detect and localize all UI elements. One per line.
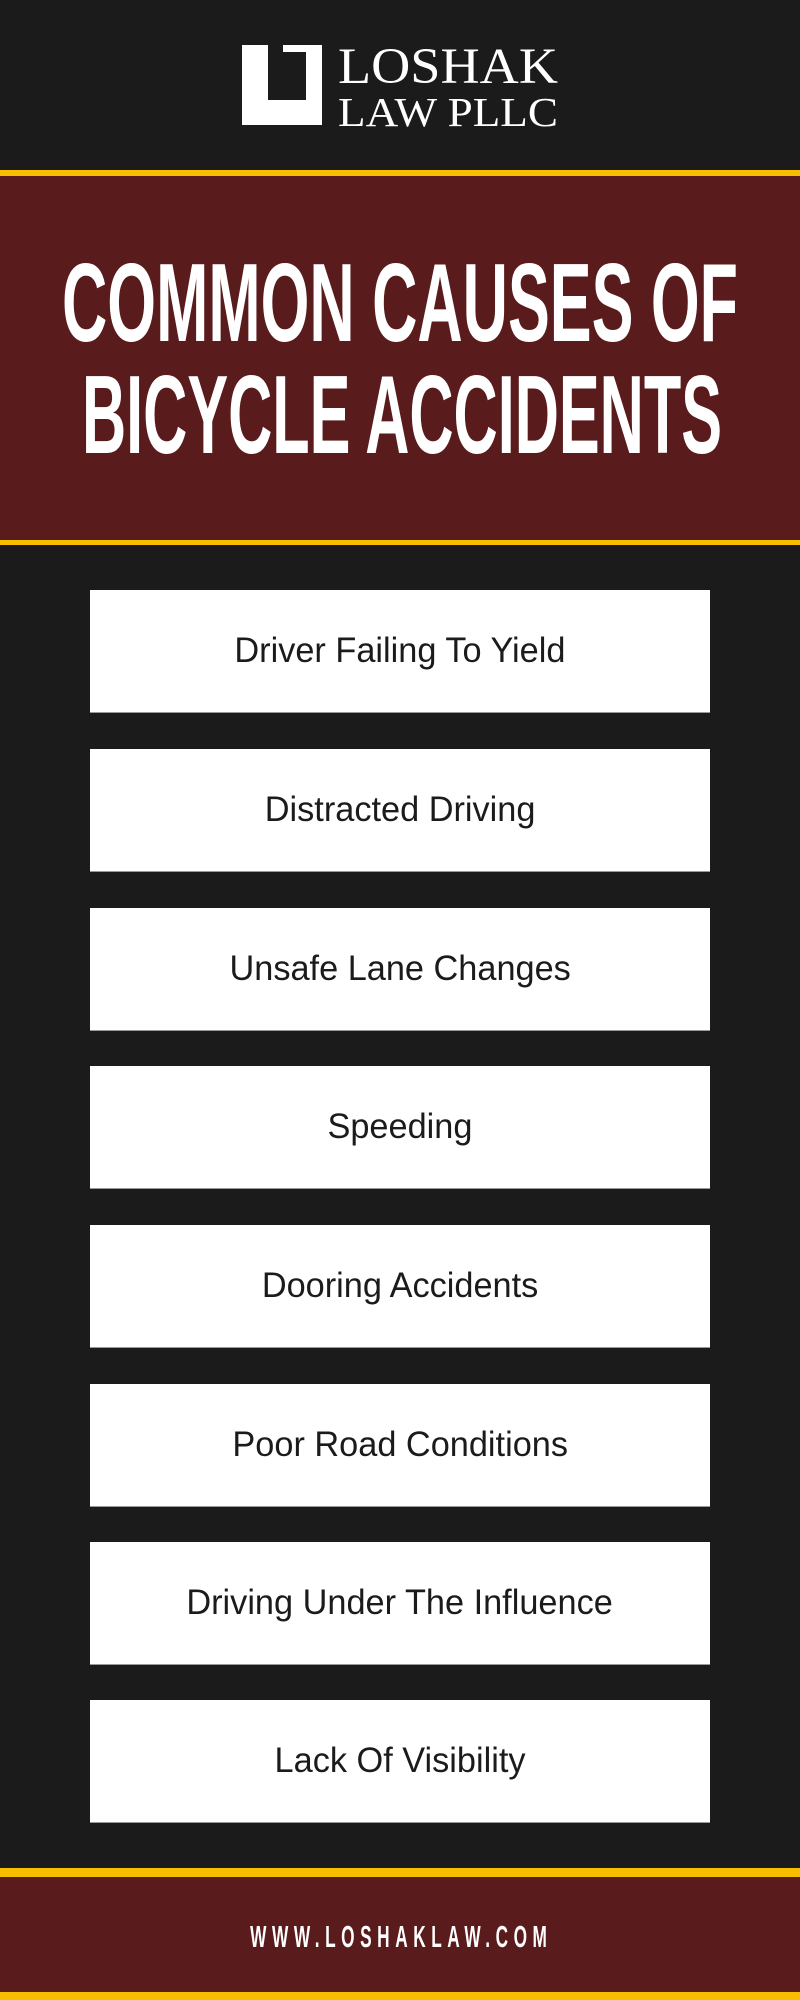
footer — [0, 1868, 800, 2000]
logo text: LOSHAK — [338, 40, 558, 95]
footer url: WWW.LOSHAKLAW.COM — [250, 1919, 552, 1954]
item: Poor Road Conditions: Poor Road Conditions — [232, 1425, 568, 1464]
title banner — [0, 170, 800, 545]
item: Dooring Accidents — [90, 1225, 710, 1348]
item: Lack Of Visibility: Lack Of Visibility — [274, 1741, 525, 1780]
item: Driver Failing To Yield: Driver Failing To Yield — [234, 631, 566, 670]
item: Driving Under The Influence — [90, 1542, 710, 1665]
title — [62, 241, 738, 477]
item: Speeding: Speeding — [328, 1107, 472, 1146]
logo text — [338, 39, 558, 135]
item: Speeding — [90, 1066, 710, 1189]
logo — [242, 40, 558, 130]
item: Unsafe Lane Changes — [90, 908, 710, 1031]
item: Distracted Driving: Distracted Driving — [265, 790, 535, 829]
item: Poor Road Conditions — [90, 1384, 710, 1507]
item: Lack Of Visibility — [90, 1700, 710, 1823]
item: Unsafe Lane Changes: Unsafe Lane Changes — [229, 949, 571, 988]
item: Dooring Accidents: Dooring Accidents — [262, 1266, 538, 1305]
icon: logo mark — [242, 45, 322, 125]
item: Driving Under The Influence: Driving Under The Influence — [187, 1583, 613, 1622]
item: Distracted Driving — [90, 749, 710, 872]
item: Driver Failing To Yield — [90, 590, 710, 713]
